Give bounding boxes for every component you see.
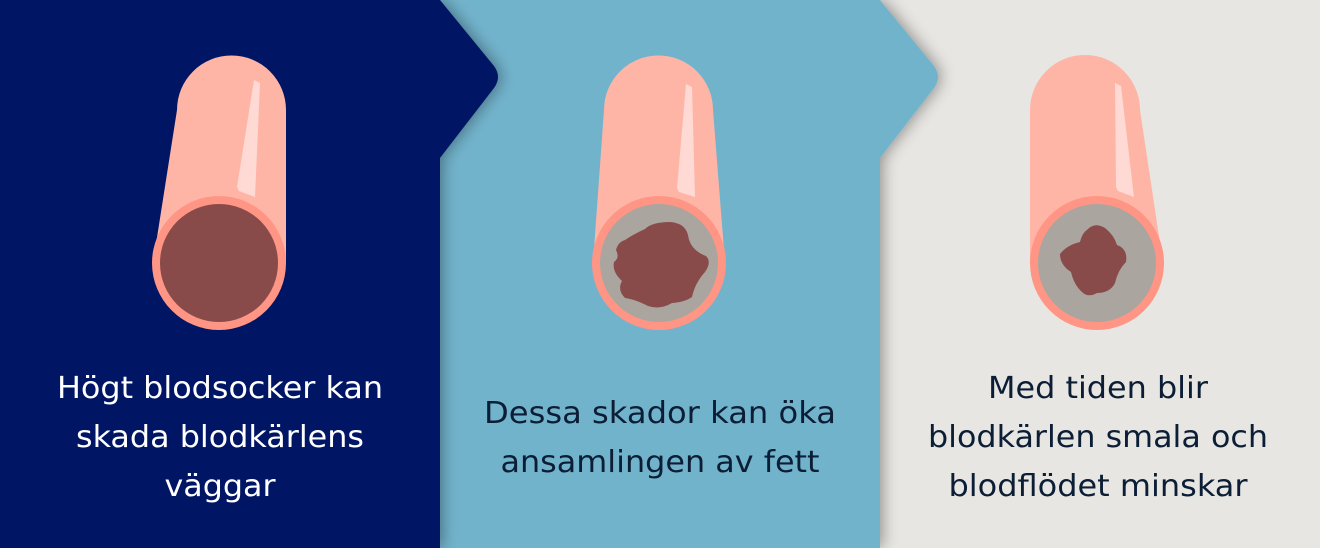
text: step 2 [484,396,836,480]
text: step 3: blodkärlen smala och [928,420,1268,455]
icon: narrowed vessel [1030,55,1164,330]
text: step 3: Med tiden blir [988,371,1209,406]
panel: light blue [0,0,938,548]
text: step 1: Högt blodsocker kan [57,371,383,406]
text: step 1: skada blodkärlens [76,420,364,455]
text: step 2: Dessa skador kan öka [484,396,836,431]
icon: vessel with fat buildup [592,55,726,330]
text: step 1 [57,371,383,504]
text: step 1: väggar [164,469,276,504]
icon: healthy vessel [152,55,286,330]
text: step 3: blodflödet minskar [948,469,1248,504]
panel: navy [0,0,498,548]
text: step 2: ansamlingen av fett [500,445,820,480]
text: step 3 [928,371,1268,504]
